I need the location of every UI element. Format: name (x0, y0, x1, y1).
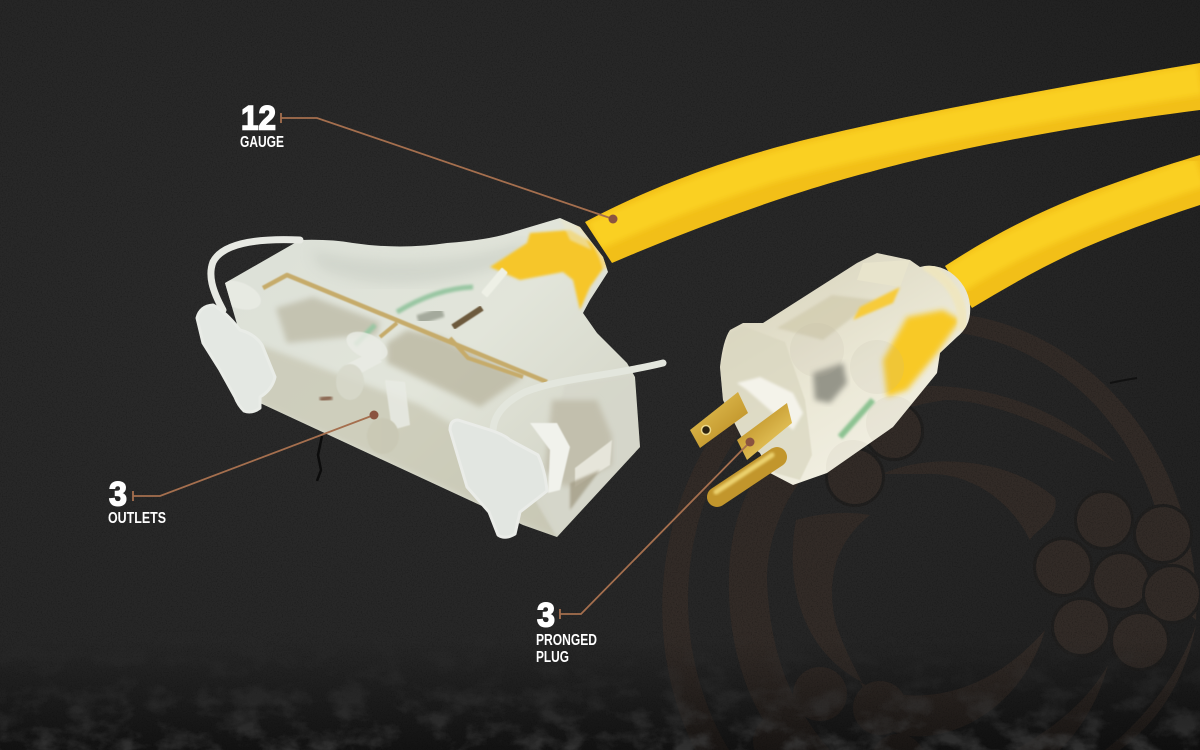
lower sweep beneath centre (860, 630, 1045, 736)
leader line (560, 442, 750, 619)
strap: left cap tether (211, 240, 300, 310)
green indicator wire (355, 287, 473, 345)
value: 3 (537, 596, 555, 634)
label: OUTLETS (108, 510, 166, 527)
plug body (720, 253, 970, 485)
flat top facet (777, 295, 875, 340)
top recess (860, 262, 880, 274)
triple outlet connector (197, 218, 663, 540)
gold bus bar (263, 275, 547, 382)
right end internal parts (545, 400, 612, 487)
leader line (281, 113, 613, 219)
resistor at outlet front (320, 397, 332, 400)
callout: 3 pronged plug (536, 438, 754, 666)
outer crescent ring (662, 312, 1196, 750)
grounded plug (690, 253, 970, 497)
background logo: cable cross-section emblem (662, 312, 1199, 750)
translucent top shading (318, 246, 518, 283)
value: 3 (109, 476, 127, 514)
lower right thin sweep (1105, 625, 1196, 750)
brass blade: left (690, 392, 748, 448)
marker dot (608, 214, 618, 224)
label: PRONGED (536, 632, 597, 649)
label: GAUGE (240, 134, 284, 151)
middle crescent (729, 386, 1115, 750)
strap: right cap tether (493, 363, 663, 430)
outlet body (225, 218, 640, 537)
marker dot (370, 410, 378, 420)
front face tint (260, 345, 560, 540)
logo circles seen through clear plastic (826, 346, 910, 472)
centre block (737, 377, 803, 430)
lower strand circles (753, 667, 923, 750)
yellow cord core (883, 310, 960, 397)
face plate (720, 326, 812, 480)
cap: left outlet cover (197, 305, 275, 412)
yellow cord to outlet (585, 63, 1200, 263)
outlet posts (225, 280, 410, 428)
brass blade: neutral (737, 403, 792, 460)
collar (925, 265, 962, 330)
end face tint (536, 422, 640, 537)
yellow wire inside neck (490, 230, 607, 310)
inner crescent left (793, 513, 870, 682)
green wire (840, 400, 873, 437)
neck collar (578, 222, 607, 268)
shadowed inner panels (276, 297, 380, 343)
blade hole (702, 426, 710, 434)
white lead and diode (484, 270, 505, 295)
callout: 3 pronged plug: PLUG (536, 649, 569, 666)
yellow cord to plug (945, 155, 1200, 308)
leader line (133, 415, 374, 501)
marker dot (746, 438, 754, 446)
callout: 3 outlets (108, 410, 378, 527)
metal core (813, 363, 847, 403)
value: 12 (241, 100, 276, 138)
cap: right outlet cover (450, 420, 547, 537)
callout: 12 gauge (240, 100, 618, 224)
inner crescent top (882, 461, 1056, 540)
strand circles with dark halos (828, 404, 1199, 668)
lower right sweep (1015, 665, 1108, 750)
round ground pin (717, 457, 777, 497)
